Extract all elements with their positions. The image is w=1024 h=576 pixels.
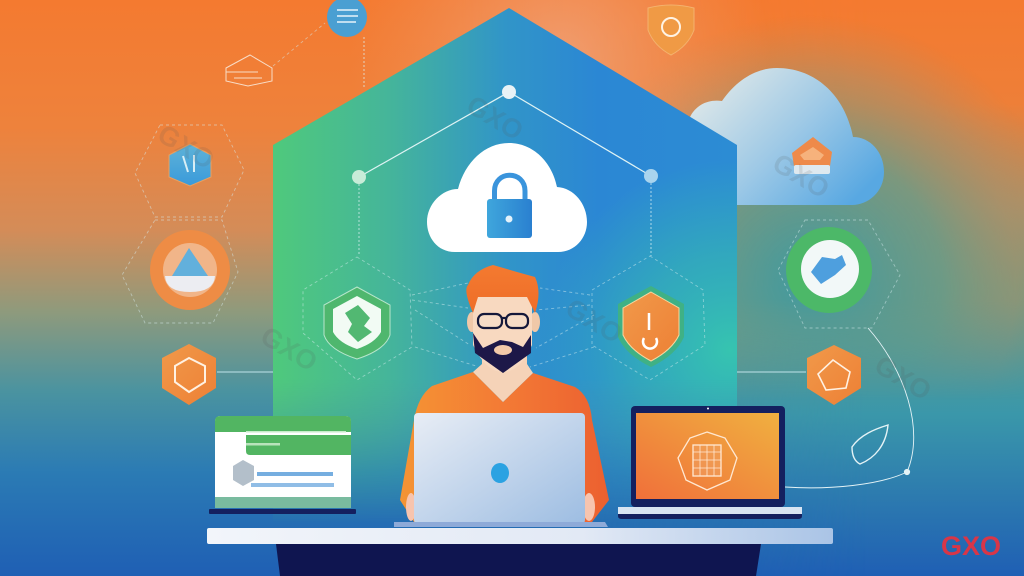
right laptop [618,406,802,519]
glasses [478,314,528,328]
icon: padlock [487,175,532,238]
hands [406,493,416,521]
icon: house in cloud [792,137,832,174]
watermarks: GXO [462,90,528,146]
neck and face [473,335,533,402]
dashed hexagon outlines [122,23,900,380]
beard [473,333,531,373]
icon: green circle with cloud [786,227,872,313]
left laptop [209,416,356,514]
hair [466,265,538,313]
icon: calendar badge [678,432,737,490]
right background cloud [680,68,884,205]
watermarks: GXO [256,321,322,377]
person [400,265,609,522]
icon: outline envelope [226,55,272,86]
icon: orange small hexagon right [737,345,861,405]
watermarks: GXO [870,350,936,406]
icon: outline pointer with curved connector [785,328,914,488]
central house-shaped shield panel [273,8,737,540]
watermarks: GXO [768,148,834,204]
icon: grey shield [233,460,254,486]
watermarks: GXO [153,119,219,175]
network lines in panel [352,37,658,256]
icon: blue hexagon [169,144,211,186]
watermarks: GXO [561,293,627,349]
icon: top document circle [327,0,367,37]
center laptop [394,413,608,527]
icon: orange small hexagon left [162,344,273,405]
icon: orange shield [618,286,684,367]
icon: top shield [648,5,694,55]
brand label: GXO [941,531,1001,561]
icon: green shield [324,287,390,359]
watermarks [153,90,936,406]
sweater [400,372,609,522]
icon: orange circle with mountain [150,230,230,310]
desk [207,528,833,576]
center cloud with padlock [427,143,587,252]
